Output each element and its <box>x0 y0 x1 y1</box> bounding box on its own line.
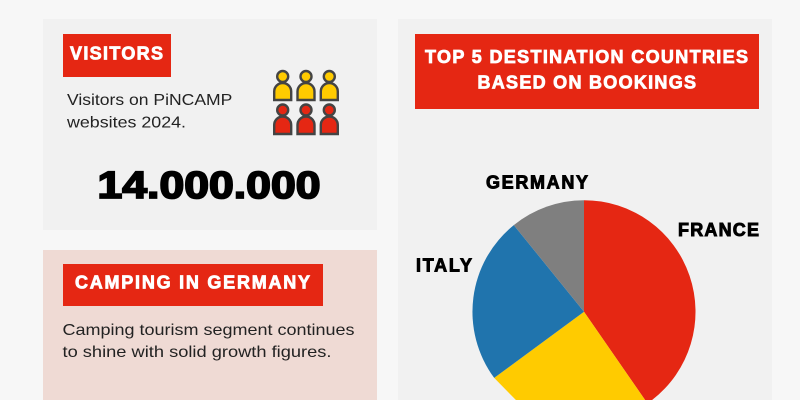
text: camping description: Camping tourism segment continues <box>62 322 354 339</box>
label: France: FRANCE <box>678 220 759 240</box>
heading: top 5 destination countries: TOP 5 DESTINATION COUNTRIES <box>425 47 748 67</box>
stat: visitors count: 14.000.000 <box>98 165 320 207</box>
text: visitors description: websites 2024. <box>66 114 186 132</box>
heading: visitors: VISITORS <box>70 44 163 64</box>
pie chart: destination countries <box>472 200 696 400</box>
icon: group of visitors <box>274 71 338 134</box>
heading: top 5 destination countries: BASED ON BOOKINGS <box>478 73 696 93</box>
panel: camping in Germany <box>43 250 377 400</box>
text: visitors description: Visitors on PiNCAMP <box>67 92 232 109</box>
panel: top 5 destination countries <box>398 19 772 400</box>
heading: visitors <box>63 34 171 77</box>
heading: camping in Germany: CAMPING IN GERMANY <box>75 272 310 292</box>
text: camping description: to shine with solid growth figures. <box>62 344 332 361</box>
label: Germany: GERMANY <box>486 173 588 193</box>
heading: camping in Germany <box>63 264 323 306</box>
label: Italy: ITALY <box>416 256 472 276</box>
heading: top 5 destination countries <box>415 34 759 109</box>
panel: visitors <box>43 19 377 230</box>
